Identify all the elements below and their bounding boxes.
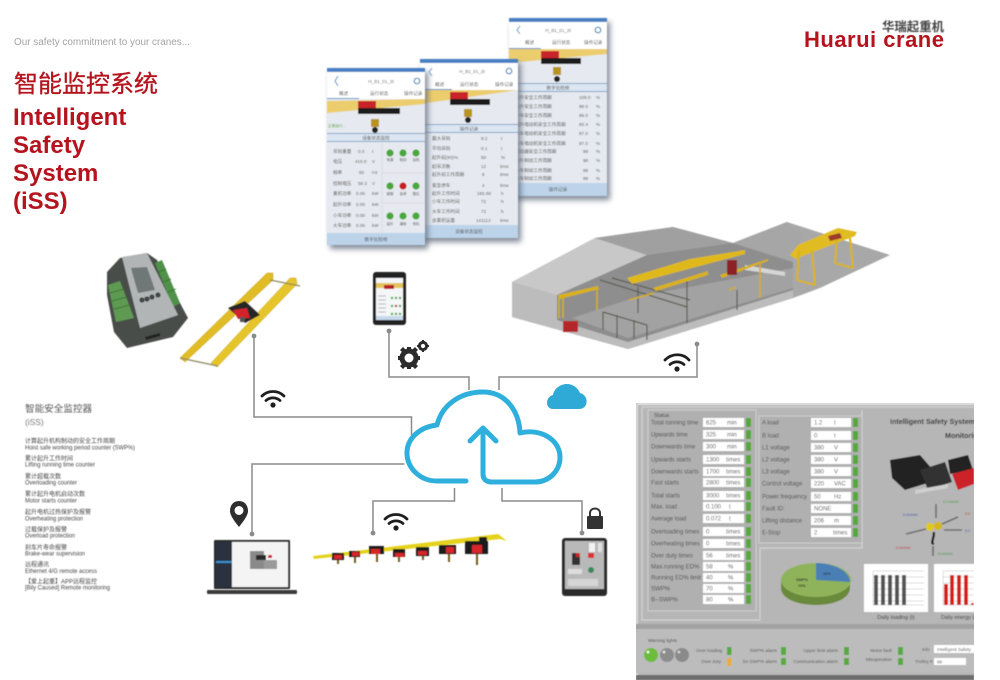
- panel: app screen B: 概述: [435, 81, 445, 88]
- panel: app screen C: 起升制动工作周期: [515, 157, 552, 164]
- panel: app screen B: time: [500, 183, 509, 188]
- text block: iSS controller features: 累计超载次数: [25, 472, 61, 480]
- title: Chinese: 智能监控系统: [14, 71, 158, 98]
- text block: iSS controller features: Overload protection: [25, 534, 75, 540]
- heading: controller: 智能安全监控器: [25, 403, 93, 415]
- panel: electrical readings: V: [834, 458, 838, 464]
- alarm indicators: [696, 647, 903, 666]
- pie chart: SWP%: [796, 578, 809, 582]
- panel: app screen C: 97.0: [579, 131, 588, 136]
- panel: app screen A: [327, 68, 428, 249]
- panel: app screen C: 起升电动机安全工作周期: [515, 121, 566, 128]
- panel: app screen A: 运行状态: [370, 90, 389, 97]
- panel: app screen B: 紧急停车: [432, 182, 451, 189]
- panel: app screen A: 通信: [400, 221, 407, 226]
- panel: app screen A: 0.0: [358, 149, 365, 154]
- panel: status readings: Total running time: [651, 420, 699, 426]
- panel: monitoring dashboard: [630, 400, 987, 680]
- logo: 华瑞起重机: [882, 19, 945, 34]
- panel: electrical readings: 1.2: [814, 420, 823, 426]
- panel: app screen C: 起升安全工作周期: [515, 103, 552, 110]
- icon: cloud upload: [407, 392, 560, 482]
- panel: status readings: [648, 410, 756, 611]
- panel: app screen C: 大车电动机安全工作周期: [515, 140, 566, 147]
- panel: app screen B: H_B1_01_2t: [459, 69, 485, 74]
- text block: iSS controller features: Overheating protection: [25, 516, 83, 522]
- panel: app screen A: 0.00: [356, 223, 365, 228]
- icon: wifi hoist rail: [385, 514, 407, 531]
- panel: status readings: times: [726, 530, 740, 536]
- panel: status readings: 2800: [706, 480, 720, 486]
- bar chart: daily energy: Daily energy (kWh): [941, 615, 987, 621]
- text block: iSS controller features: 【爱上起重】APP远程监控: [25, 578, 97, 586]
- title: English: Intelligent: [13, 104, 126, 131]
- panel: electrical readings: B load: [762, 434, 779, 440]
- panel: app screen B: 起吊次数: [432, 163, 451, 170]
- warning lights: Warning lights: [648, 638, 678, 643]
- panel: app screen B: 设备状态监控: [455, 228, 483, 235]
- panel: app screen A: 控制电压: [333, 180, 352, 187]
- panel: app screen C: %: [596, 141, 600, 146]
- panel: app screen B: 72: [481, 209, 487, 214]
- panel: app screen C: [509, 18, 610, 200]
- panel: app screen B: 运行状态: [460, 81, 479, 88]
- alarm indicators: Misoperation: [866, 657, 892, 662]
- panel: app screen B: 起升工作时间: [432, 190, 460, 197]
- panel: status readings: min: [727, 420, 737, 426]
- panel: electrical readings: t: [834, 420, 836, 426]
- panel: app screen C: 起升安全工作周期: [515, 94, 552, 101]
- bar chart: daily loading: Daily loading (t): [877, 615, 915, 621]
- panel: app screen C: 小车制动工作周期: [515, 167, 552, 174]
- panel: electrical readings: Fault ID:: [762, 506, 785, 512]
- pie chart: [781, 563, 851, 605]
- info fields: Trolley #: [915, 659, 933, 664]
- panel: app screen B: h: [501, 199, 504, 204]
- alarm indicators: Motor fault: [870, 648, 893, 653]
- panel: status readings: t: [729, 516, 731, 522]
- panel: electrical readings: V: [834, 470, 838, 476]
- hoist diagram: 6.0m/min: [896, 546, 911, 550]
- info fields: [915, 645, 976, 665]
- panel: app screen C: 99.0: [579, 104, 588, 109]
- panel: app screen A: 限位: [413, 191, 420, 196]
- panel: app screen B: 0.1: [481, 146, 488, 151]
- panel: app screen B: t: [501, 136, 503, 141]
- panel: status readings: times: [726, 494, 740, 500]
- panel: app screen C: %: [596, 176, 600, 181]
- panel: app screen B: time: [500, 164, 509, 169]
- panel: status readings: Max.running ED%: [651, 564, 700, 570]
- panel: status readings: Over duty times: [651, 554, 693, 560]
- icon: gears: [398, 340, 429, 369]
- panel: app screen B: 50: [481, 155, 487, 160]
- panel: app screen A: 起升功率: [333, 201, 352, 208]
- icon: location pin: [230, 501, 248, 527]
- panel: app screen C: 99: [583, 176, 589, 181]
- panel: app screen A: 小车功率: [333, 212, 352, 219]
- panel: status readings: 1300: [706, 458, 720, 464]
- panel: app screen B: 141113: [476, 218, 491, 223]
- panel: electrical readings: m: [834, 518, 839, 524]
- panel: app screen A: 吊钩重量: [333, 148, 352, 155]
- panel: app screen A: 大车功率: [333, 222, 352, 229]
- panel: app screen C: 制动器安全工作周期: [515, 148, 557, 155]
- panel: status readings: times: [726, 458, 740, 464]
- panel: app screen B: time: [500, 218, 509, 223]
- panel: app screen A: 设备状态监控: [362, 134, 390, 142]
- alarm indicators: Over duty: [701, 659, 722, 664]
- panel: status readings: %: [728, 598, 734, 604]
- text block: iSS controller features: Ethernet 4/G remote access: [25, 569, 97, 575]
- panel: status readings: times: [726, 470, 740, 476]
- panel: status readings: Fast starts: [651, 480, 679, 486]
- panel: status readings: 0.100: [706, 504, 722, 510]
- panel: app screen A: 正常运行...: [328, 123, 345, 128]
- icon: wifi building: [665, 355, 689, 372]
- panel: status readings: Overloading times: [651, 530, 699, 536]
- panel: electrical readings: VAC: [834, 482, 847, 488]
- panel: status readings: Downwards starts: [651, 470, 699, 476]
- panel: app screen C: %: [596, 149, 600, 154]
- panel: status readings: 56: [706, 554, 713, 560]
- panel: app screen A: 59.3: [358, 181, 367, 186]
- text block: iSS controller features: Brake-wear supervision: [25, 552, 85, 558]
- panel: app screen A: 概述: [339, 90, 349, 97]
- panel: app screen B: 9.2: [481, 136, 488, 141]
- panel: app screen C: %: [596, 104, 600, 109]
- warning lights: [644, 638, 689, 662]
- panel: electrical readings: 50: [814, 494, 821, 500]
- panel: app screen B: [420, 59, 521, 242]
- panel: electrical readings: V: [834, 446, 838, 452]
- icon: wifi crane: [262, 392, 284, 408]
- panel: app screen C: 99: [583, 149, 589, 154]
- panel: app screen A: 制动: [400, 157, 407, 162]
- text block: iSS controller features: Hoist safe working period counter (SWP%): [25, 446, 135, 452]
- panel: app screen A: t: [372, 149, 374, 154]
- bar chart: daily energy: [934, 564, 974, 620]
- hoist diagram: 6.0m/min: [938, 552, 953, 556]
- panel: app screen A: V: [372, 181, 376, 186]
- panel: electrical readings: times: [833, 530, 847, 536]
- panel: status readings: Downwards time: [651, 444, 696, 450]
- panel: status readings: 325: [706, 432, 717, 438]
- alarm indicators: Sn-SWP% alarm: [743, 659, 777, 664]
- title: English: [13, 104, 126, 215]
- panel: status readings: times: [726, 480, 740, 486]
- phone device: [373, 272, 406, 325]
- panel: app screen A: Hz: [372, 170, 378, 175]
- panel: app screen B: 操作记录: [495, 81, 514, 88]
- panel: status readings: times: [726, 554, 740, 560]
- panel: status readings: Total starts: [651, 494, 680, 500]
- tagline: Our safety commitment to your cranes...: [14, 37, 190, 48]
- panel: electrical readings: [759, 416, 862, 543]
- panel: electrical readings: 206: [814, 518, 825, 524]
- panel: app screen B: 165.60: [477, 191, 491, 196]
- building with cranes: [512, 222, 890, 349]
- bar chart: daily loading: [864, 564, 928, 621]
- text block: iSS controller features: 刹车片寿命报警: [25, 544, 67, 552]
- title: English: System: [13, 160, 98, 187]
- panel: status readings: 0.072: [706, 516, 722, 522]
- panel: app screen C: 83.4: [579, 122, 588, 127]
- panel: app screen C: 99.0: [579, 113, 588, 118]
- panel: app screen C: 97.0: [579, 141, 588, 146]
- panel: app screen B: 12: [481, 164, 487, 169]
- panel: app screen B: 最大吊钩: [432, 135, 451, 142]
- panel: app screen C: 数字化检修: [547, 84, 570, 92]
- panel: app screen B: 72: [481, 199, 487, 204]
- panel: app screen A: 操作记录: [404, 90, 423, 97]
- panel: status readings: Max. load: [651, 504, 677, 510]
- iSS controller device: [107, 253, 188, 348]
- alarm indicators: Communication alarm: [793, 659, 838, 664]
- tablet: [562, 538, 607, 596]
- panel: status readings: 40: [706, 576, 713, 582]
- panel: status readings: SWP%: [651, 586, 671, 592]
- panel: app screen A: 超载: [387, 191, 394, 196]
- panel: app screen C: 运行状态: [552, 39, 571, 46]
- panel: electrical readings: L2 voltage: [762, 458, 790, 464]
- panel: app screen A: V: [372, 159, 376, 164]
- panel: app screen A: 电源: [387, 157, 394, 162]
- panel: app screen B: h: [501, 191, 504, 196]
- panel: status readings: 1700: [706, 470, 720, 476]
- panel: app screen A: 416.0: [355, 159, 367, 164]
- panel: app screen C: 操作记录: [584, 39, 603, 46]
- panel: app screen A: 重机功率: [333, 190, 352, 197]
- panel: status readings: Average load: [651, 516, 686, 522]
- info fields: Intelligent Safety: [937, 647, 972, 652]
- panel: status readings: B--SWP%: [651, 598, 679, 604]
- text block: iSS controller features: [25, 403, 135, 592]
- structure: [745, 265, 785, 276]
- text block: iSS controller features: 计算起升机构制动的安全工作周期: [25, 437, 115, 445]
- title: English: Safety: [13, 132, 86, 159]
- panel: app screen C: %: [596, 158, 600, 163]
- panel: app screen B: 操作记录: [460, 126, 479, 132]
- hoist rail: [313, 534, 507, 565]
- panel: app screen C: %: [596, 95, 600, 100]
- text block: iSS controller features: (iSS): [25, 417, 44, 427]
- panel: electrical readings: 0: [814, 434, 818, 440]
- panel: app screen B: 大车工作时间: [432, 208, 460, 215]
- panel: app screen B: 起升前(80)%: [432, 154, 458, 161]
- hoist diagram: 6.0: [965, 529, 970, 533]
- heading: dashboard title: Intelligent Safety System: [890, 417, 975, 426]
- panel: electrical readings: A load: [762, 420, 779, 426]
- panel: app screen A: 50: [359, 170, 365, 175]
- panel: app screen A: 0.00: [356, 213, 365, 218]
- panel: electrical readings: 380: [814, 458, 825, 464]
- panel: app screen B: 6: [482, 172, 485, 177]
- panel: electrical readings: Control voltage: [762, 482, 803, 488]
- panel: status readings: 70: [706, 586, 713, 592]
- panel: electrical readings: 220: [814, 482, 825, 488]
- panel: app screen A: kW: [372, 202, 379, 207]
- alarm indicators: SWP% alarm: [750, 648, 777, 653]
- panel: app screen A: kW: [372, 213, 379, 218]
- pie chart: 30%: [823, 572, 831, 576]
- panel: app screen C: %: [596, 122, 600, 127]
- panel: status readings: Overheating times: [651, 542, 700, 548]
- info fields: 99: [937, 660, 943, 664]
- panel: electrical readings: L1 voltage: [762, 446, 790, 452]
- panel: app screen B: 起升前工作周期: [432, 171, 465, 178]
- hoist diagram: 0.0: [965, 512, 970, 516]
- panel: app screen A: 电压: [333, 158, 343, 165]
- panel: app screen A: 电机: [413, 221, 420, 226]
- pie chart: 70%: [798, 584, 806, 588]
- panel: status readings: %: [728, 564, 734, 570]
- yellow cranes: [627, 250, 745, 284]
- icon: padlock: [587, 508, 603, 529]
- icon: small cloud: [547, 384, 587, 409]
- panel: app screen B: 4: [482, 183, 485, 188]
- panel: app screen C: %: [596, 131, 600, 136]
- panel: status readings: 3000: [706, 494, 720, 500]
- panel: status readings: 80: [706, 598, 713, 604]
- text block: iSS controller features: 过载保护及报警: [25, 526, 67, 534]
- text block: iSS controller features: Motor starts counter: [25, 498, 77, 504]
- panel: status readings: Status: [654, 413, 670, 419]
- panel: electrical readings: E-Stop: [762, 530, 781, 536]
- panel: app screen C: 98: [583, 168, 589, 173]
- info fields: Info: [922, 647, 930, 652]
- heading: dashboard title: Monitoring: [945, 431, 982, 440]
- panel: app screen A: kW: [372, 223, 379, 228]
- panel: status readings: min: [727, 432, 737, 438]
- panel: app screen B: t: [501, 146, 503, 151]
- panel: electrical readings: Lifting distance: [762, 518, 803, 524]
- panel: electrical readings: 380: [814, 446, 825, 452]
- panel: status readings: %: [728, 586, 734, 592]
- panel: app screen B: h: [501, 209, 504, 214]
- panel: app screen C: 概述: [525, 39, 535, 46]
- panel: app screen C: 小车安全工作周期: [515, 112, 552, 119]
- panel: status readings: Upwards time: [651, 432, 688, 438]
- text block: iSS controller features: 累计起升工作时间: [25, 454, 73, 462]
- panel: app screen B: time: [500, 172, 509, 177]
- panel: app screen A: 起升: [387, 221, 394, 226]
- panel: status readings: min: [727, 444, 737, 450]
- panel: electrical readings: Hz: [834, 494, 841, 500]
- panel: app screen C: 小车电动机安全工作周期: [515, 130, 566, 137]
- title: English: (iSS): [13, 188, 68, 215]
- panel: app screen B: 小车工作时间: [432, 198, 460, 205]
- panel: app screen A: 急停: [400, 191, 407, 196]
- panel: status readings: 625: [706, 420, 717, 426]
- panel: status readings: times: [726, 542, 740, 548]
- panel: status readings: 300: [706, 444, 717, 450]
- logo: Huarui crane: [804, 27, 944, 52]
- hoist diagram: [890, 455, 974, 556]
- alarm indicators: Upper limit alarm: [803, 648, 838, 653]
- panel: app screen A: 加热: [413, 157, 420, 162]
- panel: electrical readings: Power frequency: [762, 494, 807, 500]
- panel: app screen A: 0.00: [356, 202, 365, 207]
- text block: iSS controller features: [Bily Caused] Remote monitoring: [25, 586, 110, 592]
- panel: app screen C: %: [596, 113, 600, 118]
- panel: app screen B: 总累积运量: [432, 217, 455, 224]
- panel: app screen C: %: [596, 168, 600, 173]
- panel: app screen B: 平均吊钩: [432, 145, 451, 152]
- right gantry crane: [790, 228, 857, 259]
- panel: app screen A: kW: [372, 191, 379, 196]
- panel: app screen A: 0.00: [356, 191, 365, 196]
- panel: status readings: 0: [706, 542, 710, 548]
- laptop: [207, 540, 297, 594]
- panel: electrical readings: NONE: [814, 506, 831, 512]
- overhead crane: [180, 273, 300, 367]
- panel: app screen C: H_B1_01_2t: [545, 28, 571, 33]
- panel: app screen A: H_B1_01_2t: [368, 79, 394, 84]
- connector lines: [250, 329, 699, 536]
- panel: status readings: 58: [706, 564, 713, 570]
- panel: app screen B: %: [501, 155, 505, 160]
- panel: electrical readings: t: [834, 434, 836, 440]
- alarm indicators: Over loading: [696, 648, 722, 653]
- panel: app screen A: 数字化检修: [365, 236, 388, 243]
- hoist diagram: 6.0m/min: [903, 513, 918, 517]
- panel: status readings: Upwards starts: [651, 458, 691, 464]
- panel: status readings: Running ED% limit: [651, 576, 701, 582]
- panel: app screen C: 98: [583, 158, 589, 163]
- text block: iSS controller features: 远程通讯: [25, 560, 49, 568]
- text block: iSS controller features: Lifting running time counter: [25, 462, 95, 468]
- panel: status readings: t: [729, 504, 731, 510]
- panel: app screen A: 频率: [333, 169, 343, 176]
- text block: iSS controller features: 起升电机过热保护及报警: [25, 508, 91, 516]
- panel: app screen C: 大车制动工作周期: [515, 175, 552, 182]
- panel: status readings: %: [728, 576, 734, 582]
- text block: iSS controller features: 累计起升电机启动次数: [25, 490, 85, 498]
- panel: electrical readings: 380: [814, 470, 825, 476]
- text block: iSS controller features: Overloading counter: [25, 480, 77, 486]
- panel: status readings: 0: [706, 530, 710, 536]
- heading: dashboard title: [890, 418, 974, 438]
- panel: app screen C: 操作记录: [549, 186, 568, 193]
- panel: electrical readings: 2: [814, 530, 818, 536]
- panel: app screen C: 108.0: [579, 95, 591, 100]
- hoist diagram: 0.3 m/min: [943, 500, 959, 504]
- panel: electrical readings: L3 voltage: [762, 470, 790, 476]
